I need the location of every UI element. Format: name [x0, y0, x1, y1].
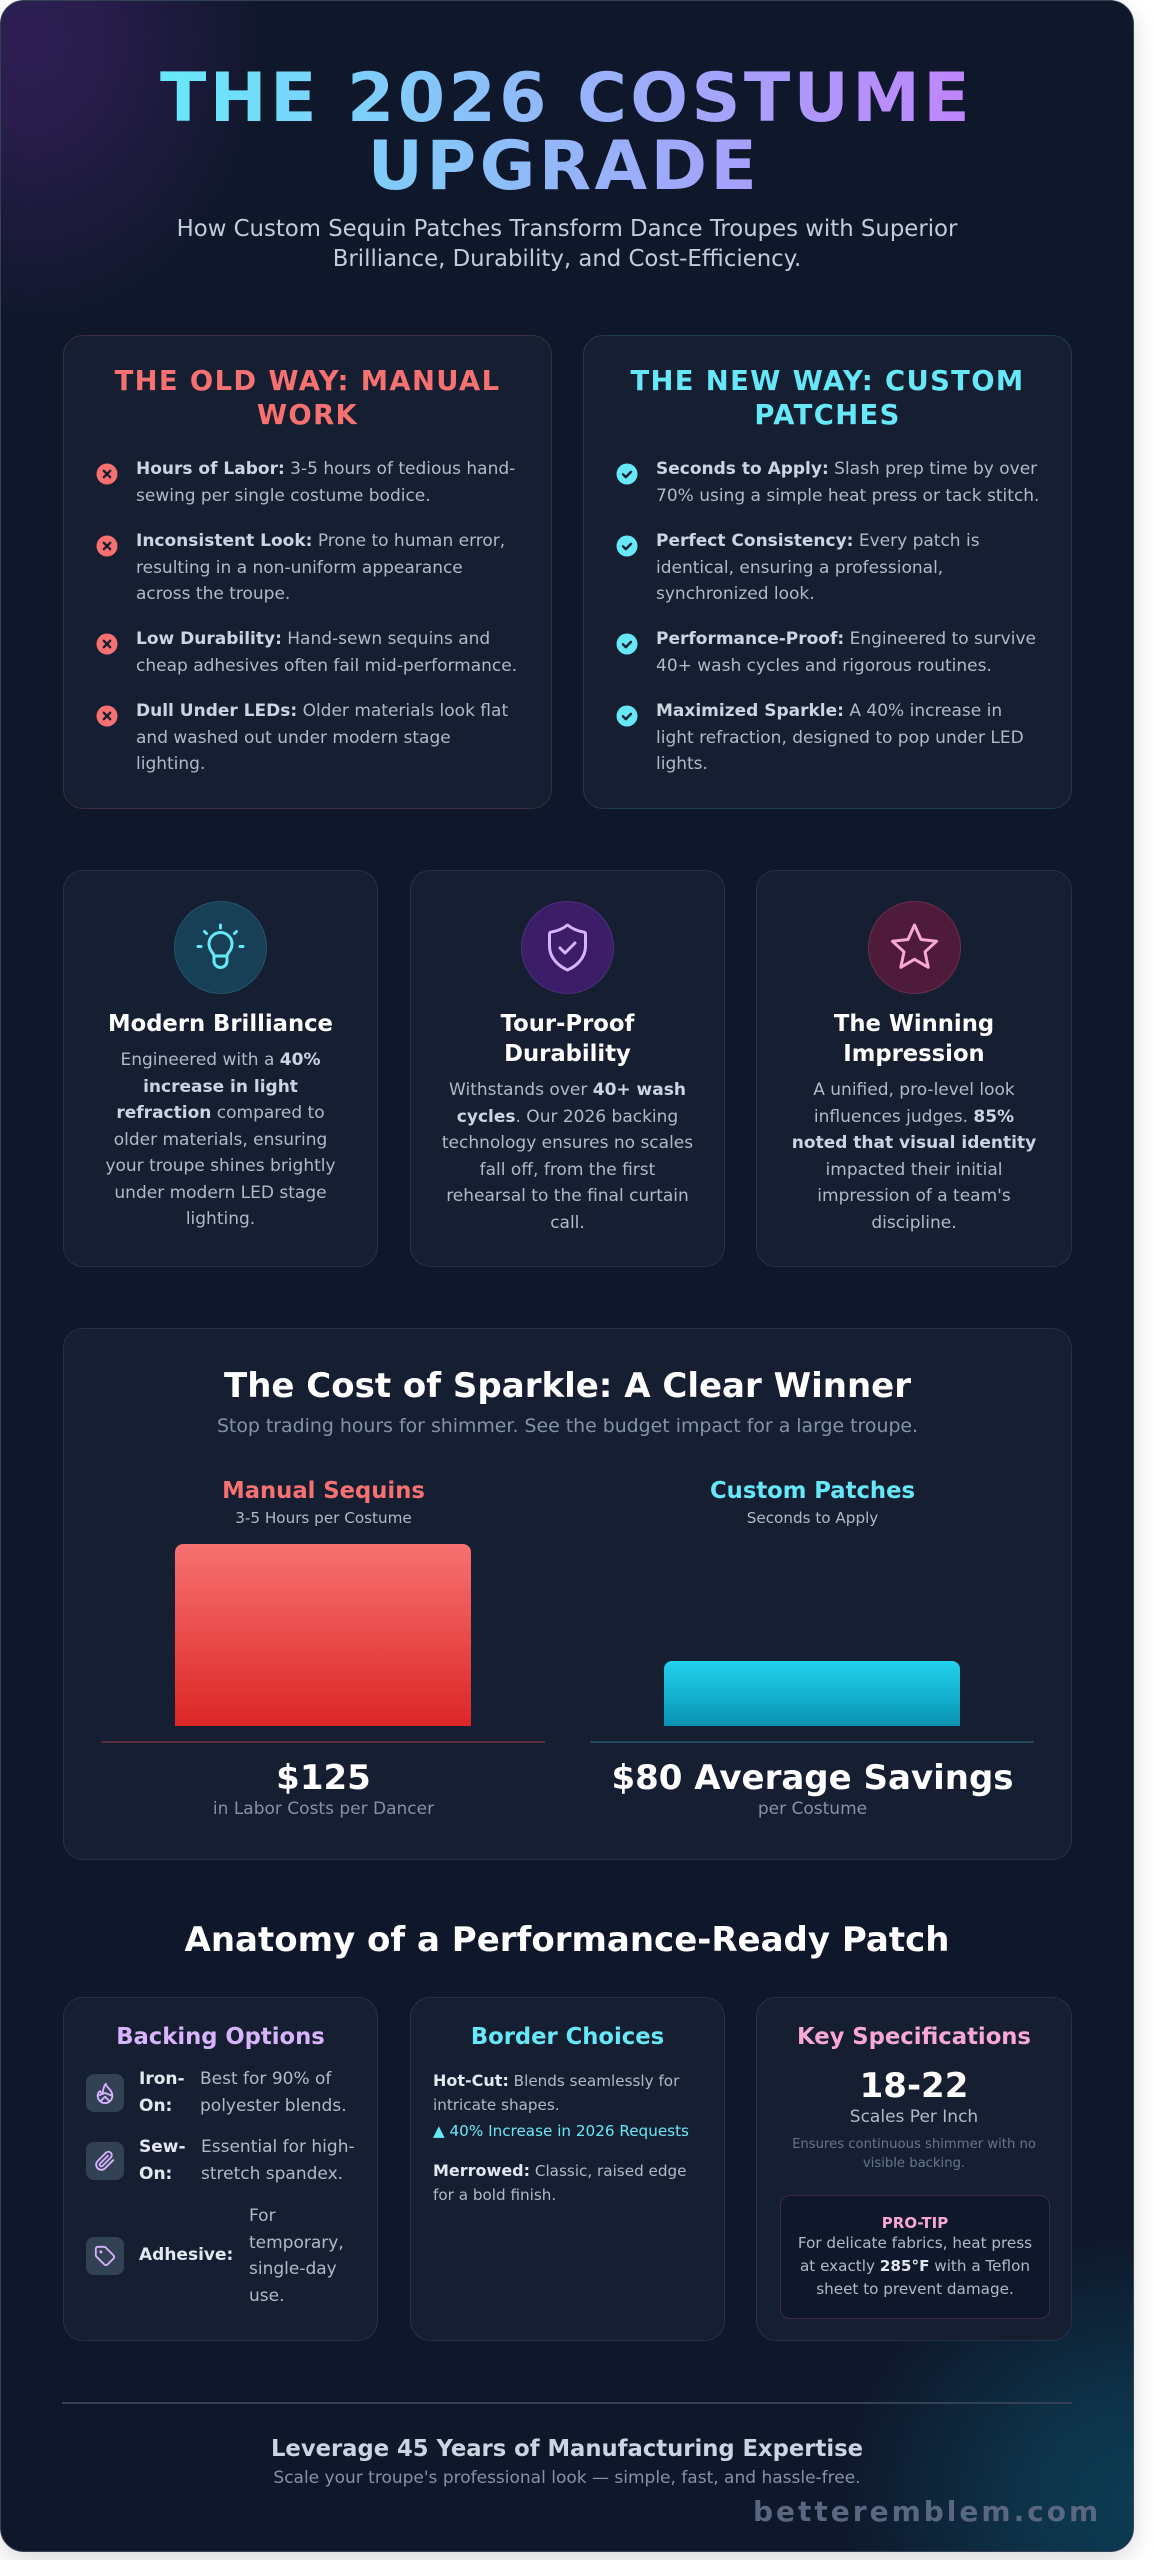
description: your troupe shines brightly	[105, 1156, 336, 1176]
text: merrowed	[433, 2161, 687, 2204]
title	[160, 65, 968, 201]
icon: tag	[86, 2237, 124, 2275]
description: cycles. Our 2026 backing	[457, 1106, 678, 1126]
callout text: sheet to prevent damage.	[816, 2280, 1014, 2298]
footer headline: Leverage 45 Years of Manufacturing Expertise	[271, 2436, 863, 2462]
list item: perfect consistency: Perfect Consistency: Every patch is	[656, 531, 980, 551]
bar: custom	[664, 1661, 960, 1726]
chart: manual sequins	[101, 1478, 545, 1819]
stat note: visible backing.	[863, 2156, 965, 2171]
panel: backing options	[63, 1997, 378, 2341]
list item: perfect consistency: identical, ensuring a professional,	[656, 558, 943, 578]
heading: the winning impression: Impression	[843, 1041, 985, 1067]
icon: check mark	[616, 536, 638, 556]
label: Iron-	[139, 2069, 185, 2089]
text: hot-cut: intricate shapes.	[433, 2096, 560, 2114]
icon: star	[868, 901, 961, 994]
list item: dull under LEDs	[136, 701, 508, 774]
callout text	[798, 2234, 1032, 2298]
list item: performance proof	[656, 629, 1036, 676]
description: under modern LED stage	[114, 1182, 327, 1202]
footer sub line: Scale your troupe's professional look — simple, fast, and hassle-free.	[273, 2468, 861, 2488]
subtitle	[177, 216, 958, 272]
label: Manual Sequins	[222, 1478, 425, 1504]
description: older materials, ensuring	[114, 1130, 327, 1150]
panel: modern brilliance	[63, 870, 378, 1267]
hours note: 3-5 Hours per Costume	[235, 1509, 412, 1527]
heading: the new way: PATCHES	[754, 400, 901, 431]
list item: inconsistent look	[136, 531, 505, 604]
panel: the winning impression	[756, 870, 1072, 1267]
icon: check mark	[616, 634, 638, 654]
heading: the old way	[114, 366, 500, 431]
heading: the old way: WORK	[257, 400, 358, 431]
baseline	[101, 1741, 545, 1743]
panel: key specifications	[756, 1997, 1072, 2341]
subtitle: How Custom Sequin Patches Transform Dance Troupes with Superior	[177, 216, 957, 242]
label: Adhesive:	[139, 2245, 233, 2265]
sub heading: Stop trading hours for shimmer. See the budget impact for a large troupe.	[217, 1415, 918, 1437]
heading: the new way	[630, 366, 1025, 431]
text: temporary,	[249, 2233, 344, 2253]
panel: the new way	[583, 335, 1072, 809]
text	[200, 2069, 347, 2116]
list item: inconsistent look: resulting in a non-uniform appearance	[136, 558, 463, 578]
list item: seconds to apply	[656, 459, 1039, 506]
baseline	[590, 1741, 1034, 1743]
title: THE 2026 COSTUME	[160, 59, 973, 138]
panel: tour-proof durability	[410, 870, 725, 1267]
heading: the old way: THE OLD WAY: MANUAL	[115, 366, 500, 397]
description: discipline.	[871, 1212, 957, 1232]
option: iron-on	[86, 2069, 347, 2116]
value: $80 Average Savings	[611, 1758, 1014, 1798]
icon: shield	[521, 901, 614, 994]
stat label: Scales Per Inch	[850, 2107, 978, 2127]
callout text: For delicate fabrics, heat press	[798, 2234, 1032, 2252]
option: sew-on	[86, 2137, 355, 2184]
description: technology ensures no scales	[442, 1133, 693, 1153]
value note: per Costume	[758, 1799, 867, 1819]
callout text: at exactly 285°F with a Teflon	[800, 2257, 1030, 2275]
description: rehearsal to the final curtain	[446, 1186, 689, 1206]
description	[792, 1080, 1036, 1232]
list item: hours of labor	[136, 459, 515, 506]
icon: paperclip	[86, 2142, 124, 2180]
divider	[62, 2402, 1072, 2404]
list item: dull under LEDs: and washed out under modern stage	[136, 728, 451, 748]
label: Sew-	[139, 2137, 186, 2157]
description: refraction compared to	[116, 1103, 325, 1123]
text: single-day	[249, 2259, 337, 2279]
text	[249, 2206, 344, 2306]
description	[105, 1050, 336, 1229]
list item: dull under LEDs: Dull Under LEDs: Older materials look flat	[136, 701, 508, 721]
watermark: betteremblem.com	[753, 2495, 1101, 2528]
callout title: PRO-TIP	[882, 2214, 948, 2232]
panel: the old way	[63, 335, 552, 809]
list item: performance proof: Performance-Proof: Engineered to survive	[656, 629, 1036, 649]
heading: the winning impression: The Winning	[834, 1011, 994, 1037]
text: hot-cut	[433, 2071, 680, 2114]
value: $125	[276, 1758, 371, 1798]
list item: perfect consistency: synchronized look.	[656, 584, 815, 604]
icon: x mark	[96, 536, 118, 556]
description: noted that visual identity	[792, 1133, 1036, 1153]
text: polyester blends.	[200, 2096, 347, 2116]
option: adhesive	[86, 2206, 344, 2306]
callout: pro-tip	[780, 2195, 1050, 2319]
list item: hours of labor: sewing per single costume bodice.	[136, 486, 431, 506]
heading: anatomy: Anatomy of a Performance-Ready Patch	[185, 1920, 949, 1960]
list item: low durability: Low Durability: Hand-sewn sequins and	[136, 629, 490, 649]
label: Custom Patches	[710, 1478, 915, 1504]
icon: check mark	[616, 464, 638, 484]
list item: maximized sparkle: Maximized Sparkle: A 40% increase in	[656, 701, 1002, 721]
heading: the winning impression	[834, 1011, 994, 1067]
label	[139, 2069, 185, 2116]
description: influences judges. 85%	[814, 1106, 1014, 1126]
text: For	[249, 2206, 276, 2226]
list item: perfect consistency	[656, 531, 980, 604]
label	[139, 2137, 186, 2184]
icon: x mark	[96, 706, 118, 726]
description: Engineered with a 40%	[120, 1050, 320, 1070]
text: merrowed: Merrowed: Classic, raised edge	[433, 2161, 687, 2180]
list item: inconsistent look: Inconsistent Look: Prone to human error,	[136, 531, 505, 551]
list item: maximized sparkle: light refraction, designed to pop under LED	[656, 728, 1024, 748]
label: On:	[139, 2096, 172, 2116]
description: Withstands over 40+ wash	[449, 1080, 686, 1100]
label: On:	[139, 2164, 172, 2184]
heading: tour-proof durability	[500, 1011, 635, 1067]
heading: the new way: THE NEW WAY: CUSTOM	[630, 366, 1025, 397]
description: fall off, from the first	[480, 1160, 655, 1180]
chart: custom patches	[590, 1478, 1034, 1819]
description: increase in light	[143, 1076, 298, 1096]
text: Best for 90% of	[200, 2069, 331, 2089]
list item: hours of labor: Hours of Labor: 3-5 hours of tedious hand-	[136, 459, 515, 479]
heading: Key Specifications	[797, 2024, 1031, 2050]
icon: light bulb	[174, 901, 267, 994]
text: stretch spandex.	[201, 2164, 343, 2184]
description: lighting.	[186, 1209, 255, 1229]
heading: modern brilliance: Modern Brilliance	[108, 1011, 333, 1037]
description: impacted their initial	[826, 1160, 1002, 1180]
icon: flame	[86, 2074, 124, 2112]
stat: 40% increase: ▲ 40% Increase in 2026 Requests	[433, 2122, 689, 2140]
stat note: Ensures continuous shimmer with no	[792, 2137, 1036, 2152]
list item: seconds to apply: Seconds to Apply: Slash prep time by over	[656, 459, 1037, 479]
time note: Seconds to Apply	[747, 1509, 878, 1527]
list item: inconsistent look: across the troupe.	[136, 584, 290, 604]
list item: dull under LEDs: lighting.	[136, 754, 205, 774]
heading: Backing Options	[116, 2024, 325, 2050]
icon: x mark	[96, 634, 118, 654]
description: impression of a team's	[817, 1186, 1011, 1206]
description: call.	[550, 1212, 585, 1232]
stat note	[792, 2137, 1036, 2171]
heading: Border Choices	[471, 2024, 664, 2050]
stat: scales per inch: 18-22	[860, 2066, 968, 2106]
bar: manual	[175, 1544, 471, 1726]
icon: x mark	[96, 464, 118, 484]
heading: cost of sparkle: The Cost of Sparkle: A Clear Winner	[224, 1366, 911, 1406]
list item: low durability	[136, 629, 517, 676]
heading: tour-proof durability: Tour-Proof	[501, 1011, 634, 1037]
text: use.	[249, 2286, 284, 2306]
text	[201, 2137, 355, 2184]
subtitle: Brilliance, Durability, and Cost-Efficiency.	[333, 246, 801, 272]
description: A unified, pro-level look	[813, 1080, 1015, 1100]
list item: low durability: cheap adhesives often fail mid-performance.	[136, 656, 517, 676]
list item: performance proof: 40+ wash cycles and rigorous routines.	[656, 656, 992, 676]
list item: seconds to apply: 70% using a simple heat press or tack stitch.	[656, 486, 1039, 506]
text: hot-cut: Hot-Cut: Blends seamlessly for	[433, 2071, 679, 2090]
text: Essential for high-	[201, 2137, 355, 2157]
list item: maximized sparkle: lights.	[656, 754, 708, 774]
heading: tour-proof durability: Durability	[504, 1041, 631, 1067]
description	[442, 1080, 693, 1232]
panel: border choices	[410, 1997, 725, 2341]
icon: check mark	[616, 706, 638, 726]
value note: in Labor Costs per Dancer	[213, 1799, 434, 1819]
list item: maximized sparkle	[656, 701, 1024, 774]
text: merrowed: for a bold finish.	[433, 2186, 556, 2204]
title: UPGRADE	[368, 127, 760, 206]
panel: cost of sparkle	[63, 1328, 1072, 1860]
